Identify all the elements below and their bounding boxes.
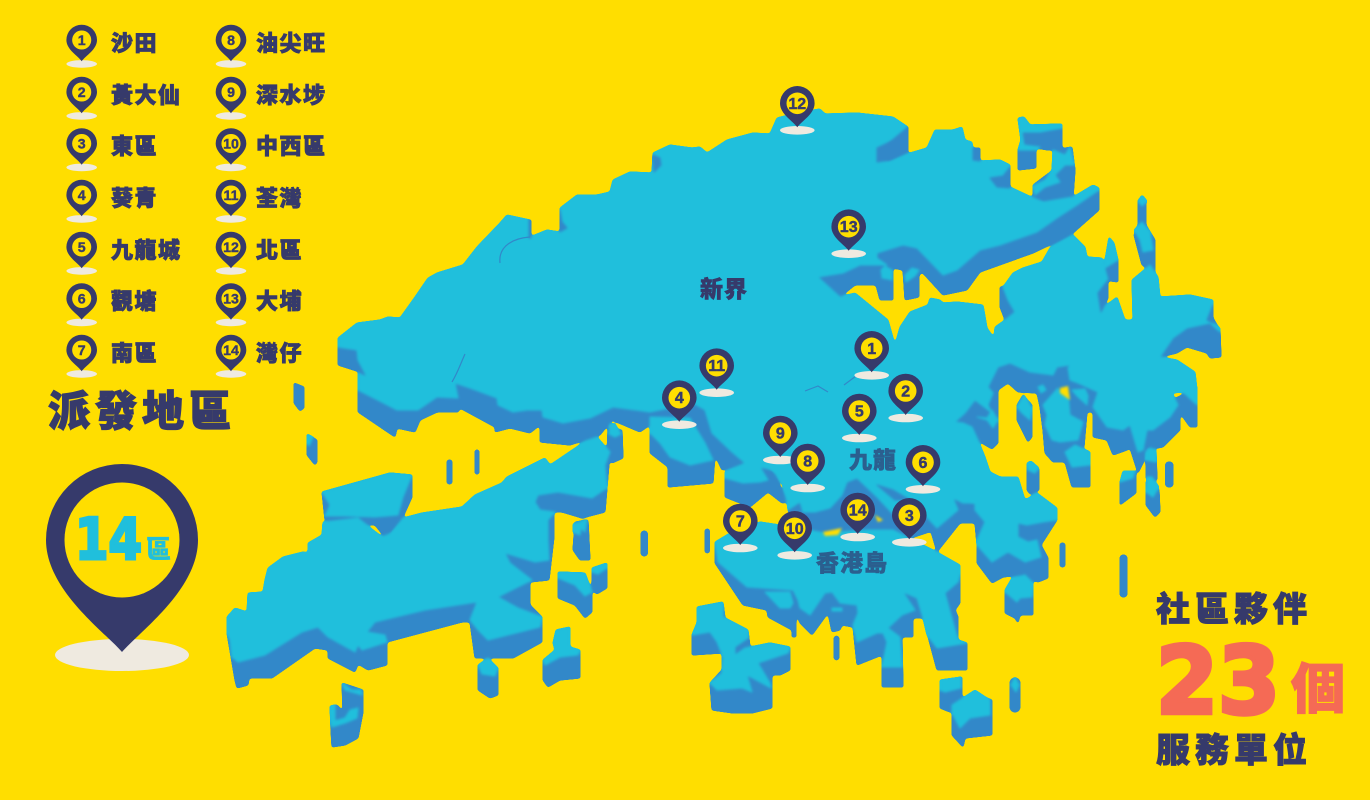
map of Hong Kong [227, 109, 1221, 747]
New Territories and Kowloon landmass [338, 109, 1220, 562]
map pin 3 [892, 498, 927, 547]
label: Kowloon: 九龍 [849, 447, 897, 473]
map pin 13: 13 [840, 219, 858, 236]
inlet lines [452, 237, 856, 392]
legend item 9 [216, 77, 327, 120]
Tseung Kwan O and Clear Water Bay underside [930, 498, 1057, 583]
legend item 12: 12 [223, 240, 239, 256]
legend item 6: 6 [78, 291, 86, 307]
Lantau island [227, 437, 610, 688]
legend item 11: 11 [224, 188, 239, 204]
dark notches on the northern coast [529, 127, 1213, 500]
sea slivers [823, 386, 1070, 536]
map pin 1: 1 [867, 341, 876, 358]
legend item 3: 東區 [111, 134, 158, 159]
legend item 14: 灣仔 [256, 341, 303, 366]
legend item 6: 觀塘 [111, 289, 158, 314]
map pin 9: 9 [776, 426, 785, 442]
legend item 1: 1 [78, 33, 86, 49]
map pin 10: 10 [786, 521, 804, 538]
legend item 8: 油尖旺 [256, 31, 327, 56]
big pin: 14 districts: 14 [75, 507, 142, 573]
big pin: 14 districts [46, 464, 198, 671]
map pin 3: 3 [905, 508, 914, 525]
eastern small islands [1005, 117, 1173, 623]
legend item 8 [216, 25, 327, 68]
Plover Cove and Tolo underside [818, 188, 1099, 300]
legend item 2: 2 [78, 85, 86, 101]
Kowloon harbour underside [788, 478, 935, 540]
label: New Territories: 新界 [700, 276, 748, 302]
map pin 13 [831, 209, 866, 258]
legend item 7: 7 [78, 343, 86, 359]
Tsing Yi and Kwai Chung channel [650, 403, 745, 487]
map pin 9 [763, 416, 798, 464]
map pin 14: 14 [849, 502, 867, 520]
stat number 23: 23 [1156, 627, 1280, 735]
Stonecutters underside [725, 465, 787, 507]
New Territories west underside [338, 340, 700, 445]
legend item 3: 3 [78, 136, 86, 152]
legend item 8: 8 [227, 33, 235, 49]
legend item 13: 大埔 [256, 289, 303, 314]
legend item 12: 北區 [256, 238, 303, 263]
stat caption: 服務單位 [1156, 731, 1312, 770]
map pin 11 [699, 348, 734, 397]
Hong Kong Island [715, 522, 967, 687]
map pin 14 [840, 493, 875, 541]
legend item 2 [66, 77, 182, 120]
legend item 5: 5 [78, 240, 86, 256]
small islands around Lantau [330, 520, 607, 747]
map pin 6 [906, 445, 940, 494]
legend item 6 [66, 283, 158, 326]
heading: distribution districts: 派發地區 [48, 388, 236, 435]
legend item 7 [66, 335, 158, 378]
label: Hong Kong Island: 香港島 [816, 550, 888, 576]
map pin 6: 6 [919, 455, 928, 472]
legend item 9: 深水埗 [256, 83, 327, 108]
legend item 13 [216, 283, 303, 326]
map pin 5 [842, 394, 877, 442]
legend item 7: 南區 [111, 341, 158, 366]
legend item 14 [216, 335, 303, 378]
legend item 3 [66, 128, 158, 171]
map pin 7: 7 [736, 514, 745, 530]
map pin 4 [662, 380, 697, 429]
map pin 1 [854, 331, 889, 380]
map pin 8 [790, 444, 825, 492]
legend item 12 [216, 232, 303, 275]
map pin 7 [723, 504, 758, 552]
map pin 5: 5 [855, 404, 864, 420]
map pin 11: 11 [708, 358, 725, 375]
legend item 10: 中西區 [256, 134, 327, 159]
High Island light lobes [881, 266, 1088, 442]
legend item 4: 葵青 [111, 186, 158, 211]
stat heading: 社區夥伴 [1156, 591, 1312, 629]
legend item 13: 13 [223, 291, 239, 307]
legend item 9: 9 [227, 85, 235, 101]
stat unit: 個 [1291, 660, 1345, 720]
map pin 4: 4 [675, 390, 684, 407]
map pin 12 [780, 86, 815, 135]
small islands west [294, 383, 648, 556]
legend item 10: 10 [223, 136, 239, 152]
map pin 2 [888, 374, 923, 422]
legend item 11: 荃灣 [256, 186, 303, 211]
legend item 4 [66, 180, 158, 223]
big pin: 14 districts: 區 [146, 536, 171, 564]
legend item 5 [66, 232, 182, 275]
legend item 4: 4 [78, 188, 86, 204]
map pin 12: 12 [788, 96, 806, 113]
map pin 10 [777, 511, 812, 560]
map pin 8: 8 [803, 454, 812, 470]
legend item 1: 沙田 [111, 31, 158, 56]
legend item 1 [66, 25, 158, 68]
Chek Lap Kok island [322, 473, 412, 537]
legend item 10 [216, 128, 327, 171]
map pin 2: 2 [901, 384, 910, 400]
legend item 14: 14 [223, 343, 239, 359]
southern islands [692, 529, 1020, 747]
legend item 11 [216, 180, 303, 223]
legend item 2: 黃大仙 [111, 83, 182, 108]
legend item 5: 九龍城 [111, 238, 182, 263]
legend: district list [66, 25, 327, 378]
stat: community partners [1156, 591, 1345, 770]
Sai Kung underside [955, 285, 1221, 473]
